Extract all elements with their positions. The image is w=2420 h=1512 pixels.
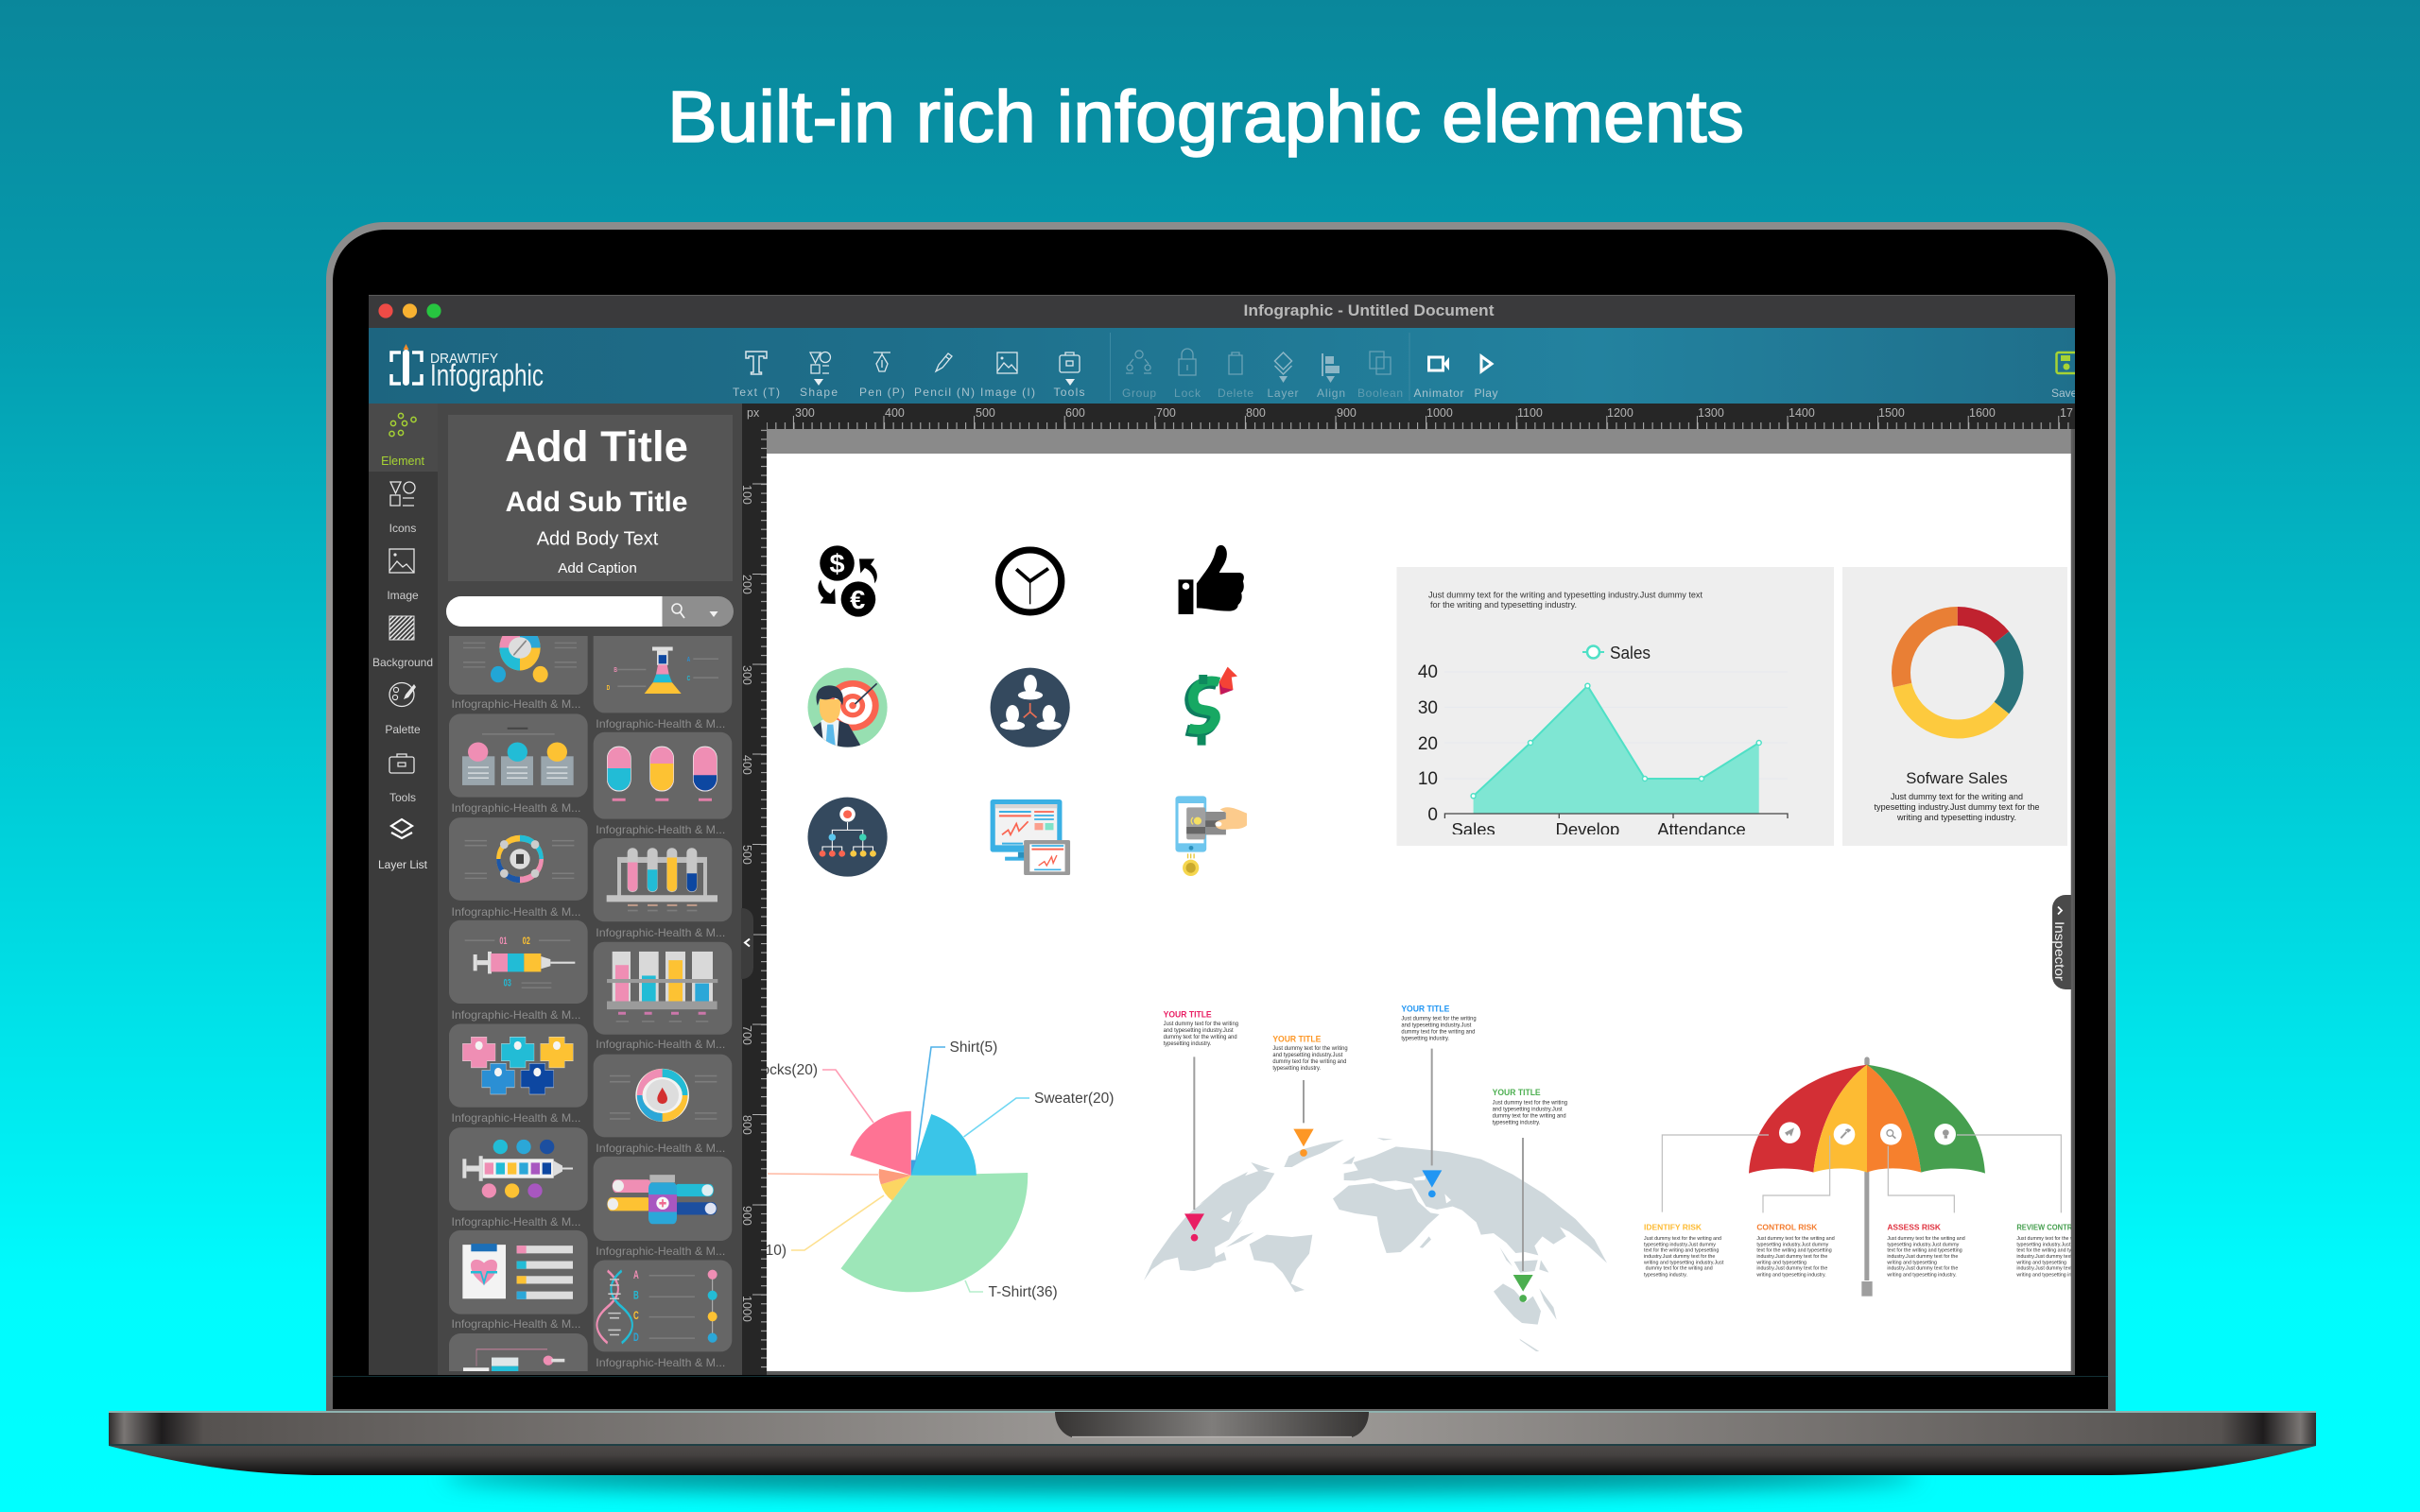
vertical ruler: 900 — [740, 1206, 753, 1226]
chart description: Just dummy text for the writing and typesetting industry.Just dummy text — [1428, 590, 1703, 601]
thumbnail: medicine bottle — [594, 1157, 732, 1258]
quick text styles block: Add Caption — [558, 560, 637, 576]
thumbnail: partial card — [449, 1333, 588, 1371]
tool: shape — [800, 352, 838, 399]
rose labels: T-Shirt(36) — [989, 1284, 1058, 1300]
laptop base — [109, 1411, 2316, 1475]
horizontal ruler: 1600 — [1969, 406, 1996, 420]
donut caption: Just dummy text for the writing and — [1891, 792, 2023, 802]
review control text: text for the writing and typesetting — [2016, 1248, 2092, 1254]
disabled tool: align — [1317, 353, 1345, 400]
assess risk text: writing and typesetting — [1886, 1260, 1937, 1265]
search box — [446, 596, 734, 627]
umbrella icon circles — [1779, 1122, 1956, 1145]
x axis: Attendance — [1657, 819, 1746, 839]
map marker: blue: Just dummy text for the writing — [1401, 1016, 1477, 1022]
rose leader lines — [768, 1047, 1029, 1292]
identify risk text: dummy text for the writing and — [1646, 1266, 1713, 1272]
sidebar: layer list: Layer List — [378, 858, 428, 871]
sidebar: icons: Icons — [389, 522, 416, 535]
left icon sidebar — [369, 404, 438, 1375]
icon: monitor and tablet analytics — [991, 799, 1070, 875]
map marker: orange: and typesetting industry.Just — [1272, 1053, 1343, 1058]
map marker: pink — [1164, 1010, 1238, 1241]
assess risk text: typesetting industry.Just dummy — [1887, 1242, 1959, 1247]
thumbnail: flask: A — [687, 656, 691, 663]
control risk text — [1755, 1223, 1835, 1278]
review control text — [2015, 1223, 2095, 1278]
horizontal ruler: 1400 — [1789, 406, 1815, 420]
disabled tool: lock: Lock — [1174, 387, 1201, 400]
map marker: green: dummy text for the writing and — [1493, 1113, 1566, 1119]
thumbnail: syringe with dots: Infographic-Health & M... — [452, 1215, 580, 1228]
panel collapse handle — [741, 908, 753, 979]
tool: pencil: Pencil (N) — [914, 386, 975, 399]
tool: save — [2051, 352, 2075, 397]
thumbnail: test tube rack — [594, 838, 732, 939]
laptop shadow — [444, 1459, 1919, 1493]
control risk text: CONTROL RISK — [1756, 1223, 1817, 1232]
chart description: for the writing and typesetting industry. — [1430, 600, 1577, 610]
horizontal ruler: 1700 — [2060, 406, 2086, 420]
thumbnail: medicine bottle: Infographic-Health & M... — [596, 1245, 725, 1258]
inspector tab: Inspector — [2052, 921, 2067, 981]
map marker: orange: dummy text for the writing and — [1272, 1059, 1346, 1065]
title bar — [369, 295, 2075, 328]
tool: pen — [859, 352, 905, 399]
vertical ruler: 100 — [740, 485, 753, 505]
map marker: orange: YOUR TITLE — [1272, 1035, 1321, 1044]
horizontal ruler: 800 — [1246, 406, 1266, 420]
y axis labels: 30 — [1418, 698, 1438, 718]
icon: thumbs up — [1179, 545, 1244, 614]
thumbnail: syringe: 03 — [504, 977, 511, 989]
world map infographic — [1144, 1005, 1607, 1351]
title bar: Infographic - Untitled Document — [1244, 301, 1495, 319]
map marker: blue: and typesetting industry.Just — [1401, 1022, 1472, 1028]
vertical ruler — [740, 429, 767, 1375]
area series — [1471, 683, 1761, 814]
rose labels: Shirt(5) — [949, 1040, 997, 1056]
icon: org chart — [807, 798, 888, 877]
umbrella — [1749, 1057, 1985, 1297]
world map — [1144, 1138, 1607, 1351]
rose sectors — [841, 1111, 1028, 1292]
vertical ruler: 200 — [740, 575, 753, 594]
thumbnail: pill ring — [449, 636, 588, 711]
thumbnail: ring diagram: Infographic-Health & M... — [452, 905, 580, 919]
horizontal ruler: 1000 — [1426, 406, 1453, 420]
donut chart — [1901, 616, 2014, 729]
identify risk text: typesetting industry. — [1644, 1272, 1687, 1278]
thumbnail: flask — [594, 594, 732, 730]
logo: Infographic — [430, 358, 544, 392]
quick text styles block: Add Title — [505, 422, 688, 471]
tool: play: Play — [1475, 387, 1497, 400]
disabled tool: group: Group — [1122, 387, 1156, 400]
thumbnail: flask: D — [607, 684, 611, 692]
control risk text: Just dummy text for the writing and — [1756, 1236, 1835, 1242]
disabled tool: align: Align — [1317, 387, 1345, 400]
vertical ruler: 800 — [740, 1115, 753, 1135]
map marker: orange — [1272, 1035, 1348, 1157]
identify risk text: writing and typesetting industry.Just — [1643, 1260, 1724, 1265]
map marker: orange: Just dummy text for the writing — [1272, 1046, 1348, 1052]
tool: save: Save — [2051, 387, 2078, 400]
identify risk text: IDENTIFY RISK — [1644, 1223, 1702, 1232]
sidebar: image — [387, 549, 419, 602]
sidebar: tools: Tools — [389, 791, 416, 804]
control risk text: typesetting industry.Just dummy — [1756, 1242, 1828, 1247]
rose labels — [752, 1040, 1114, 1300]
disabled tool: layer: Layer — [1267, 387, 1299, 400]
canvas — [752, 429, 2095, 1371]
logo: DRAWTIFY — [430, 351, 498, 367]
disabled tool: boolean — [1357, 352, 1403, 400]
thumbnail: syringe with dots — [449, 1127, 588, 1228]
control risk text: industry.Just dummy text for the — [1756, 1254, 1827, 1260]
identify risk text: Just dummy text for the writing and — [1644, 1236, 1721, 1242]
control risk text: industry.Just dummy text for the — [1756, 1266, 1827, 1272]
disabled tool: group — [1122, 351, 1156, 400]
review control text: Just dummy text for the writing and — [2016, 1236, 2095, 1242]
thumbnail: DNA list: A — [633, 1269, 639, 1281]
thumbnail: blood gauge — [594, 1055, 732, 1155]
element panel — [438, 404, 742, 1416]
map marker: green: Just dummy text for the writing — [1493, 1100, 1567, 1106]
disabled tool: delete — [1218, 352, 1253, 400]
disabled tool: delete: Delete — [1218, 387, 1253, 400]
y axis labels — [1418, 662, 1438, 825]
thumbnail: capsules: Infographic-Health & M... — [596, 823, 725, 836]
tool: tools — [1053, 352, 1085, 399]
thumbnail: flask: C — [687, 675, 691, 683]
nightingale rose chart — [752, 1040, 1114, 1300]
horizontal ruler: 700 — [1156, 406, 1176, 420]
assess risk text: industry.Just dummy text for the — [1887, 1254, 1958, 1260]
thumbnail: beakers — [594, 942, 732, 1051]
donut caption — [1874, 769, 2040, 823]
identify risk text — [1643, 1223, 1724, 1278]
thumbnail: ring diagram — [449, 817, 588, 919]
review control text: industry.Just dummy text for the — [2016, 1266, 2087, 1272]
map marker: pink: YOUR TITLE — [1164, 1010, 1212, 1020]
assess risk text: text for the writing and typesetting — [1887, 1248, 1962, 1254]
map marker: blue: typesetting industry. — [1401, 1036, 1449, 1041]
sidebar: image: Image — [387, 589, 419, 602]
x axis — [1444, 814, 1788, 839]
assess risk text: writing and typesetting industry. — [1886, 1272, 1957, 1278]
x axis: Develop — [1555, 819, 1619, 839]
thumbnail: syringe: Infographic-Health & M... — [452, 1008, 580, 1022]
map marker: green: and typesetting industry.Just — [1493, 1107, 1563, 1112]
umbrella risk infographic — [1643, 1057, 2095, 1297]
y axis labels: 40 — [1418, 662, 1438, 682]
icon grid — [807, 545, 1247, 877]
review control text: writing and typesetting industry. — [2015, 1272, 2086, 1278]
thumbnail: DNA list: C — [633, 1311, 639, 1323]
identify risk text: text for the writing and typesetting — [1644, 1248, 1719, 1254]
tool: tools: Tools — [1053, 386, 1085, 399]
review control text: writing and typesetting — [2015, 1260, 2066, 1265]
assess risk text: industry.Just dummy text for the — [1887, 1266, 1958, 1272]
thumbnail: beakers: Infographic-Health & M... — [596, 1038, 725, 1051]
y axis labels: 20 — [1418, 734, 1438, 754]
vertical ruler: 400 — [740, 755, 753, 775]
sidebar: layer list — [378, 819, 428, 871]
sidebar: palette: Palette — [385, 723, 421, 736]
control risk text: text for the writing and typesetting — [1756, 1248, 1832, 1254]
tool: shape: Shape — [800, 386, 838, 399]
tool: text — [733, 352, 780, 399]
chart legend — [1582, 643, 1651, 662]
x axis: Sales — [1451, 819, 1495, 839]
horizontal ruler: 1200 — [1607, 406, 1634, 420]
map marker: orange: typesetting industry. — [1272, 1066, 1321, 1072]
y axis labels: 0 — [1427, 805, 1438, 825]
thumbnail: clipboard heart: Infographic-Health & M... — [452, 1317, 580, 1331]
thumbnail: flask: B — [614, 666, 617, 674]
horizontal ruler: 900 — [1337, 406, 1357, 420]
inspector tab — [2052, 895, 2072, 989]
horizontal ruler: 400 — [885, 406, 905, 420]
app window — [369, 295, 2095, 1416]
thumbnail: syringe: 02 — [523, 935, 530, 947]
thumbnail: DNA list: D — [633, 1332, 639, 1345]
disabled tool: layer — [1267, 352, 1299, 400]
laptop lid — [326, 222, 2116, 1412]
thumbnail: blood gauge: Infographic-Health & M... — [596, 1142, 725, 1155]
sidebar: element: Element — [381, 455, 424, 468]
map marker: pink: dummy text for the writing and — [1164, 1035, 1237, 1040]
icon: mobile card payment — [1175, 796, 1247, 876]
disabled tool: boolean: Boolean — [1357, 387, 1403, 400]
thumbnail: flask: Infographic-Health & M... — [596, 717, 725, 730]
window bottom and right edge — [767, 429, 2072, 1372]
tool: text: Text (T) — [733, 386, 780, 399]
chart description — [1428, 590, 1703, 610]
thumbnail: crosses: Infographic-Health & M... — [452, 1111, 580, 1125]
review control text: REVIEW CONTROL — [2016, 1223, 2083, 1232]
y axis labels: 10 — [1418, 769, 1438, 789]
thumbnail: test tube rack: Infographic-Health & M... — [596, 926, 725, 939]
map marker: blue: dummy text for the writing and — [1401, 1029, 1475, 1035]
vertical ruler: 300 — [740, 665, 753, 685]
logo — [391, 344, 544, 392]
thumbnail: pill ring: Infographic-Health & M... — [452, 697, 580, 711]
vertical ruler: 500 — [740, 845, 753, 865]
thumbnail: DNA list: B — [633, 1290, 639, 1302]
tool: image — [980, 352, 1035, 399]
assess risk text: Just dummy text for the writing and — [1887, 1236, 1965, 1242]
donut caption: Sofware Sales — [1906, 769, 2008, 787]
map marker: green: typesetting industry. — [1493, 1120, 1541, 1125]
map marker: blue — [1401, 1005, 1477, 1197]
review control text: typesetting industry.Just dummy — [2016, 1242, 2088, 1247]
rose labels: 10) — [766, 1243, 786, 1259]
panel: sales line chart — [1397, 567, 1834, 846]
donut caption: writing and typesetting industry. — [1896, 813, 2016, 823]
sidebar: tools — [389, 754, 416, 804]
map marker: blue: YOUR TITLE — [1401, 1005, 1449, 1014]
template thumbnails — [449, 636, 732, 1371]
disabled tool: lock — [1175, 348, 1201, 397]
map marker: green — [1493, 1088, 1567, 1302]
thumbnail: crosses — [449, 1023, 588, 1125]
thumbnail: three circles — [449, 713, 588, 815]
thumbnail: syringe — [449, 920, 588, 1022]
icon: currency exchange: $ — [829, 549, 845, 579]
toolbar — [369, 328, 2080, 404]
horizontal ruler: 500 — [976, 406, 995, 420]
title: Built-in rich infographic elements — [667, 77, 1744, 158]
tool: pencil — [914, 353, 975, 399]
tool: play — [1475, 356, 1497, 400]
thumbnail: three circles: Infographic-Health & M... — [452, 801, 580, 815]
panel: software sales donut — [1842, 567, 2067, 846]
assess risk text: ASSESS RISK — [1887, 1223, 1941, 1232]
icon: businessman and target — [807, 668, 888, 749]
control risk text: writing and typesetting industry. — [1755, 1272, 1826, 1278]
quick text styles block — [448, 415, 733, 581]
identify risk text: typesetting industry.Just dummy — [1644, 1242, 1716, 1247]
map marker: pink: typesetting industry. — [1164, 1041, 1212, 1047]
icon: team — [991, 668, 1070, 747]
map marker: green: YOUR TITLE — [1493, 1088, 1541, 1097]
horizontal ruler: 1500 — [1878, 406, 1905, 420]
horizontal ruler — [742, 404, 2086, 429]
icon: clock — [999, 550, 1062, 612]
vertical ruler: 1000 — [740, 1296, 753, 1322]
map marker: pink: and typesetting industry.Just — [1164, 1028, 1234, 1034]
horizontal ruler: 600 — [1065, 406, 1085, 420]
quick text styles block: Add Sub Title — [506, 487, 687, 518]
thumbnail: clipboard heart — [449, 1230, 588, 1331]
thumbnail: syringe: 01 — [499, 935, 507, 947]
review control text: industry.Just dummy text for the — [2016, 1254, 2087, 1260]
horizontal ruler: 1300 — [1698, 406, 1724, 420]
icon: green dollar with arrow — [1186, 667, 1237, 746]
thumbnail: DNA list: Infographic-Health & M... — [596, 1356, 725, 1369]
sidebar: background — [372, 616, 433, 669]
chart legend: Sales — [1610, 643, 1651, 662]
quick text styles block: Add Body Text — [537, 529, 659, 550]
sidebar: icons — [389, 482, 416, 535]
thumbnail: capsules — [594, 732, 732, 836]
control risk text: writing and typesetting — [1755, 1260, 1806, 1265]
sidebar: element — [381, 413, 424, 468]
tool: animator: Animator — [1414, 387, 1463, 400]
rose labels: Sweater(20) — [1034, 1091, 1114, 1107]
donut caption: typesetting industry.Just dummy text for the — [1874, 802, 2040, 813]
assess risk text — [1886, 1223, 1965, 1278]
sidebar: palette — [385, 682, 421, 736]
horizontal ruler: 300 — [795, 406, 815, 420]
sidebar: background: Background — [372, 656, 433, 669]
connector lines — [1662, 1135, 2061, 1212]
rose labels: Socks(20) — [752, 1062, 818, 1078]
icon: currency exchange — [818, 545, 877, 617]
tool: image: Image (I) — [980, 386, 1035, 399]
tool: pen: Pen (P) — [859, 386, 905, 399]
icon: currency exchange: € — [850, 585, 865, 615]
identify risk text: industry.Just dummy text for the — [1644, 1254, 1715, 1260]
map marker: pink: Just dummy text for the writing — [1164, 1022, 1238, 1027]
horizontal ruler: px — [747, 406, 760, 420]
thumbnail: DNA list — [594, 1260, 732, 1369]
tool: animator — [1414, 357, 1463, 400]
horizontal ruler: 1100 — [1517, 406, 1543, 420]
vertical ruler: 700 — [740, 1025, 753, 1045]
